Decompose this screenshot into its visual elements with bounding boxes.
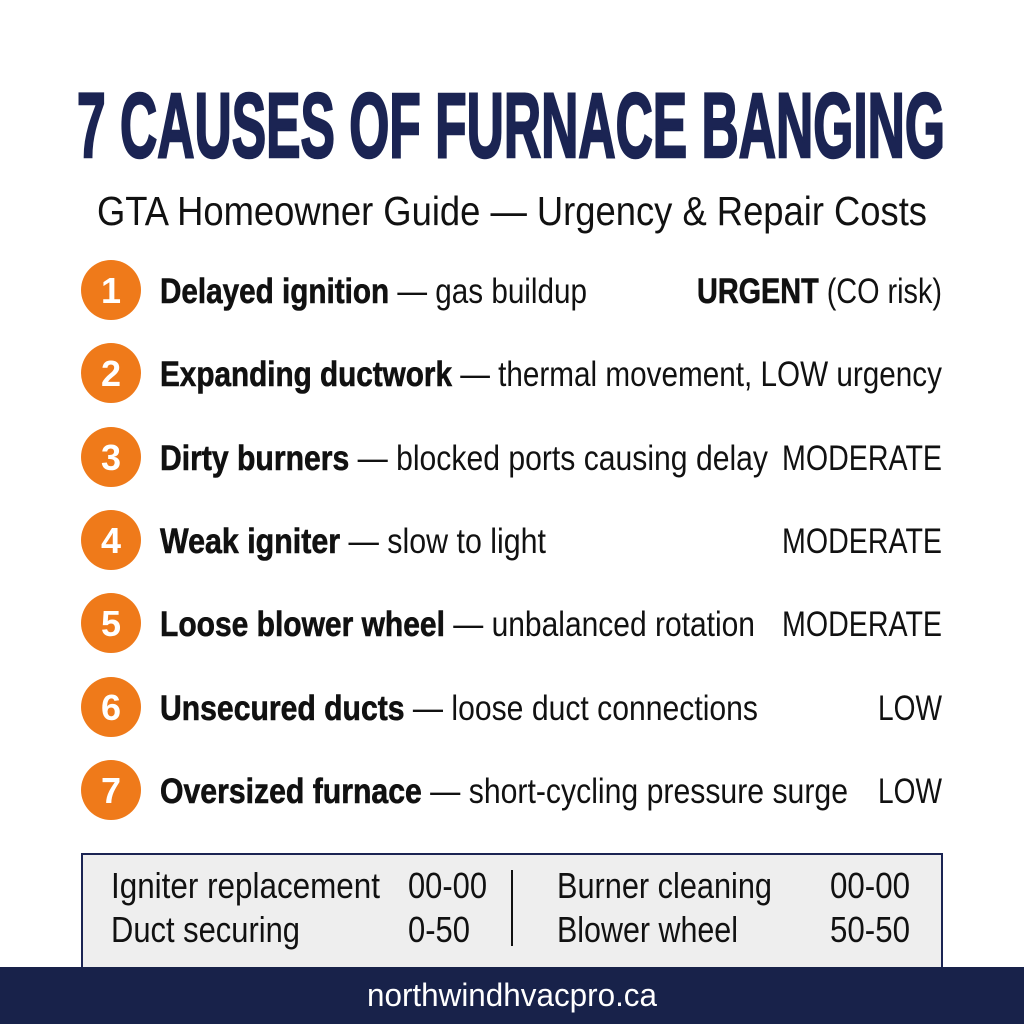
cause 7: Oversized furnace — short-cycling pressure surge [160, 772, 848, 811]
cause 3: 3 [101, 437, 121, 478]
cause 4: Weak igniter — slow to light [160, 522, 546, 561]
footer: northwindhvacpro.ca [367, 977, 657, 1013]
cause 5: 5 [101, 603, 121, 644]
cause 1: 1 [101, 270, 121, 311]
panel: repair costs: Burner cleaning [557, 865, 772, 906]
panel: repair costs: 50-50 [830, 909, 910, 950]
cause 6: Unsecured ducts — loose duct connections [160, 689, 758, 728]
cause 2: 2 [101, 353, 121, 394]
cause 3 [81, 427, 942, 487]
cause 1 [81, 260, 942, 320]
cause 7: 7 [101, 770, 121, 811]
cause 3: MODERATE [782, 439, 942, 478]
cause 1: URGENT (CO risk) [697, 272, 942, 311]
cause 1: Delayed ignition — gas buildup [160, 272, 587, 311]
panel: repair costs: 0-50 [408, 909, 470, 950]
subtitle: GTA Homeowner Guide — Urgency & Repair Costs [97, 188, 927, 234]
panel: repair costs: Duct securing [111, 909, 300, 950]
list of causes [81, 260, 942, 820]
cause 2 [81, 343, 942, 403]
cause 7: LOW [878, 772, 942, 811]
cause 3: Dirty burners — blocked ports causing delay [160, 439, 768, 478]
panel: repair costs: Blower wheel [557, 909, 738, 950]
footer [0, 967, 1024, 1024]
cause 5 [81, 593, 942, 653]
cause 6: 6 [101, 687, 121, 728]
cause 2: Expanding ductwork — thermal movement, LOW urgency [160, 355, 942, 394]
cause 4: 4 [101, 520, 121, 561]
cause 6: LOW [878, 689, 942, 728]
cause 5: MODERATE [782, 605, 942, 644]
panel: repair costs: 00-00 [408, 865, 487, 906]
cause 7 [81, 760, 942, 820]
panel: repair costs [82, 854, 942, 974]
cause 4 [81, 510, 942, 570]
cause 6 [81, 677, 942, 737]
panel: repair costs: Igniter replacement [111, 865, 380, 906]
cause 4: MODERATE [782, 522, 942, 561]
cause 5: Loose blower wheel — unbalanced rotation [160, 605, 755, 644]
panel: repair costs: 00-00 [830, 865, 910, 906]
